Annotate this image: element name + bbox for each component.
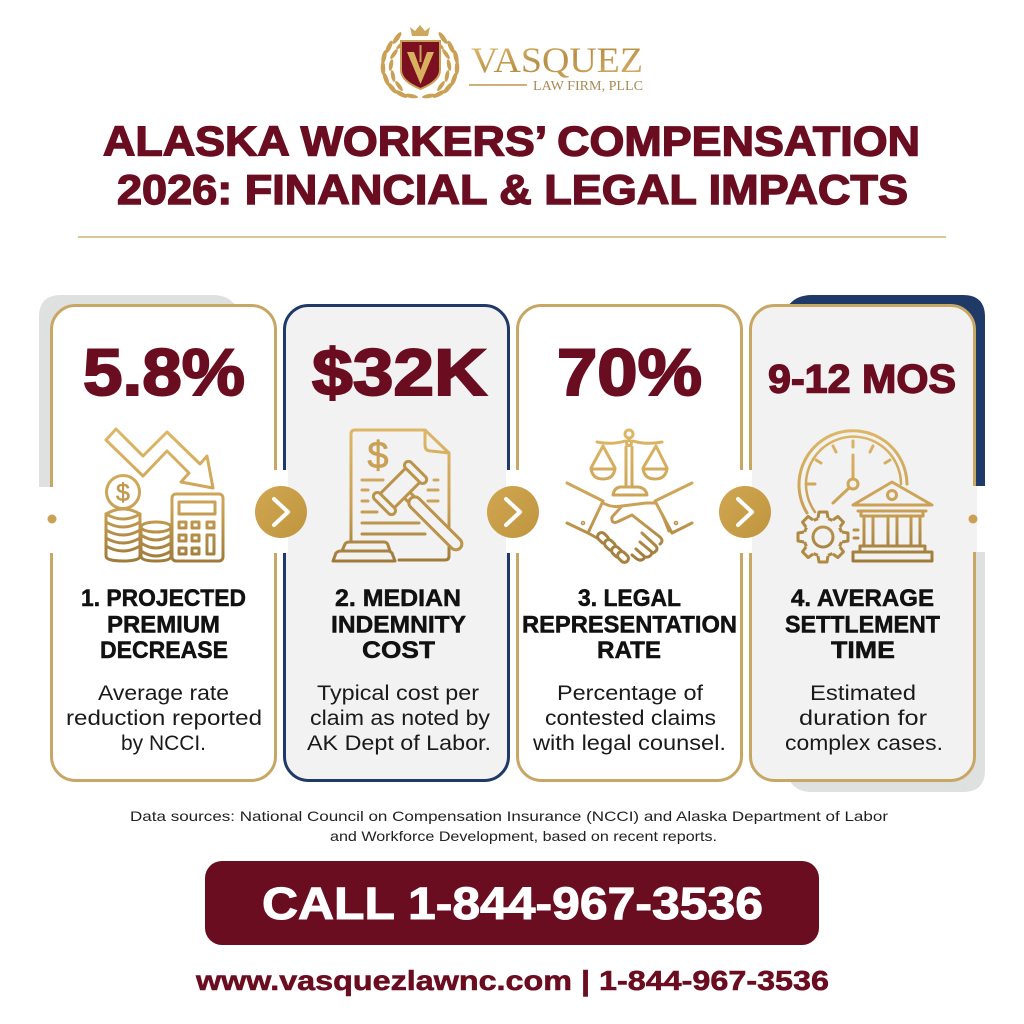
panel: legal representation [518, 306, 742, 780]
description [307, 681, 491, 755]
description: Typical cost per [317, 681, 479, 705]
stat: $32K [312, 335, 487, 409]
side gaps in the frames [36, 470, 989, 553]
logo [380, 25, 643, 99]
title: ALASKA WORKERS’ COMPENSATION [103, 118, 920, 164]
description: contested claims [545, 706, 716, 730]
icon: falling arrow, coins, calculator [106, 429, 223, 561]
backing shape: grey top left [39, 295, 236, 487]
call to action button [205, 861, 819, 945]
data sources note: Data sources: National Council on Compensation Insurance (NCCI) and Alaska Department of Labor [130, 808, 888, 824]
card frame [750, 306, 974, 780]
heading: COST [362, 637, 435, 664]
heading: SETTLEMENT [785, 612, 940, 638]
icon: document and gavel [333, 430, 449, 561]
logo subtitle: LAW FIRM, PLLC [533, 79, 643, 94]
heading: DECREASE [100, 637, 228, 664]
description: by NCCI. [121, 731, 206, 755]
left connector dot [48, 514, 56, 524]
description: AK Dept of Labor. [307, 731, 491, 755]
arrow: step 2 to 3 [487, 486, 539, 538]
icon: falling arrow, coins, calculator: $ [116, 479, 130, 507]
heading: 4. AVERAGE [791, 585, 934, 612]
logo emblem [380, 25, 460, 99]
heading: REPRESENTATION [522, 612, 737, 638]
heading: 1. PROJECTED [81, 585, 246, 612]
heading: 2. MEDIAN [335, 585, 461, 612]
data sources note [130, 808, 888, 844]
description: with legal counsel. [532, 731, 726, 755]
description: reduction reported [66, 706, 262, 730]
heading [81, 585, 246, 664]
stat: 5.8% [83, 335, 245, 409]
heading [331, 585, 466, 664]
arrow: step 1 to 2 [255, 486, 307, 538]
heading [785, 585, 940, 664]
description: complex cases. [785, 731, 943, 755]
heading [522, 585, 737, 664]
description: Estimated [810, 681, 916, 705]
heading: INDEMNITY [331, 612, 466, 638]
card frame [518, 306, 742, 780]
icon: gear teeth [798, 512, 848, 562]
data sources note: and Workforce Development, based on recent reports. [330, 828, 717, 844]
logo wordmark: VASQUEZ [471, 40, 643, 80]
stat: 70% [557, 335, 702, 409]
description: Percentage of [557, 681, 703, 705]
logo rule [469, 84, 527, 86]
stat: 9-12 MOS [768, 358, 956, 402]
heading: 3. LEGAL [578, 585, 681, 612]
description: Average rate [98, 681, 229, 705]
icon: document and gavel: $ [367, 435, 389, 477]
backing shape: grey bottom right [790, 552, 985, 792]
panel: settlement time [750, 306, 974, 780]
heading: RATE [597, 637, 661, 664]
arrow: step 3 to 4 [719, 486, 771, 538]
title [103, 118, 920, 213]
call to action button: CALL 1-844-967-3536 [262, 878, 763, 929]
backing shape: navy top right [788, 295, 985, 486]
card frame [52, 306, 276, 780]
icon: clock, gear and courthouse [799, 431, 932, 561]
footer contact line: www.vasquezlawnc.com | 1-844-967-3536 [195, 965, 829, 996]
description [532, 681, 726, 755]
heading: TIME [831, 637, 895, 664]
panel: premium decrease [52, 306, 276, 780]
heading: PREMIUM [107, 612, 220, 638]
description [66, 681, 262, 755]
panel: indemnity cost [284, 306, 508, 780]
right connector dot [968, 514, 978, 524]
icon: scales and handshake [567, 430, 692, 564]
description: duration for [799, 706, 927, 730]
description [785, 681, 943, 755]
icon: gavel [372, 460, 478, 566]
description: claim as noted by [310, 706, 490, 730]
title: 2026: FINANCIAL & LEGAL IMPACTS [117, 166, 908, 213]
card frame [284, 306, 508, 780]
